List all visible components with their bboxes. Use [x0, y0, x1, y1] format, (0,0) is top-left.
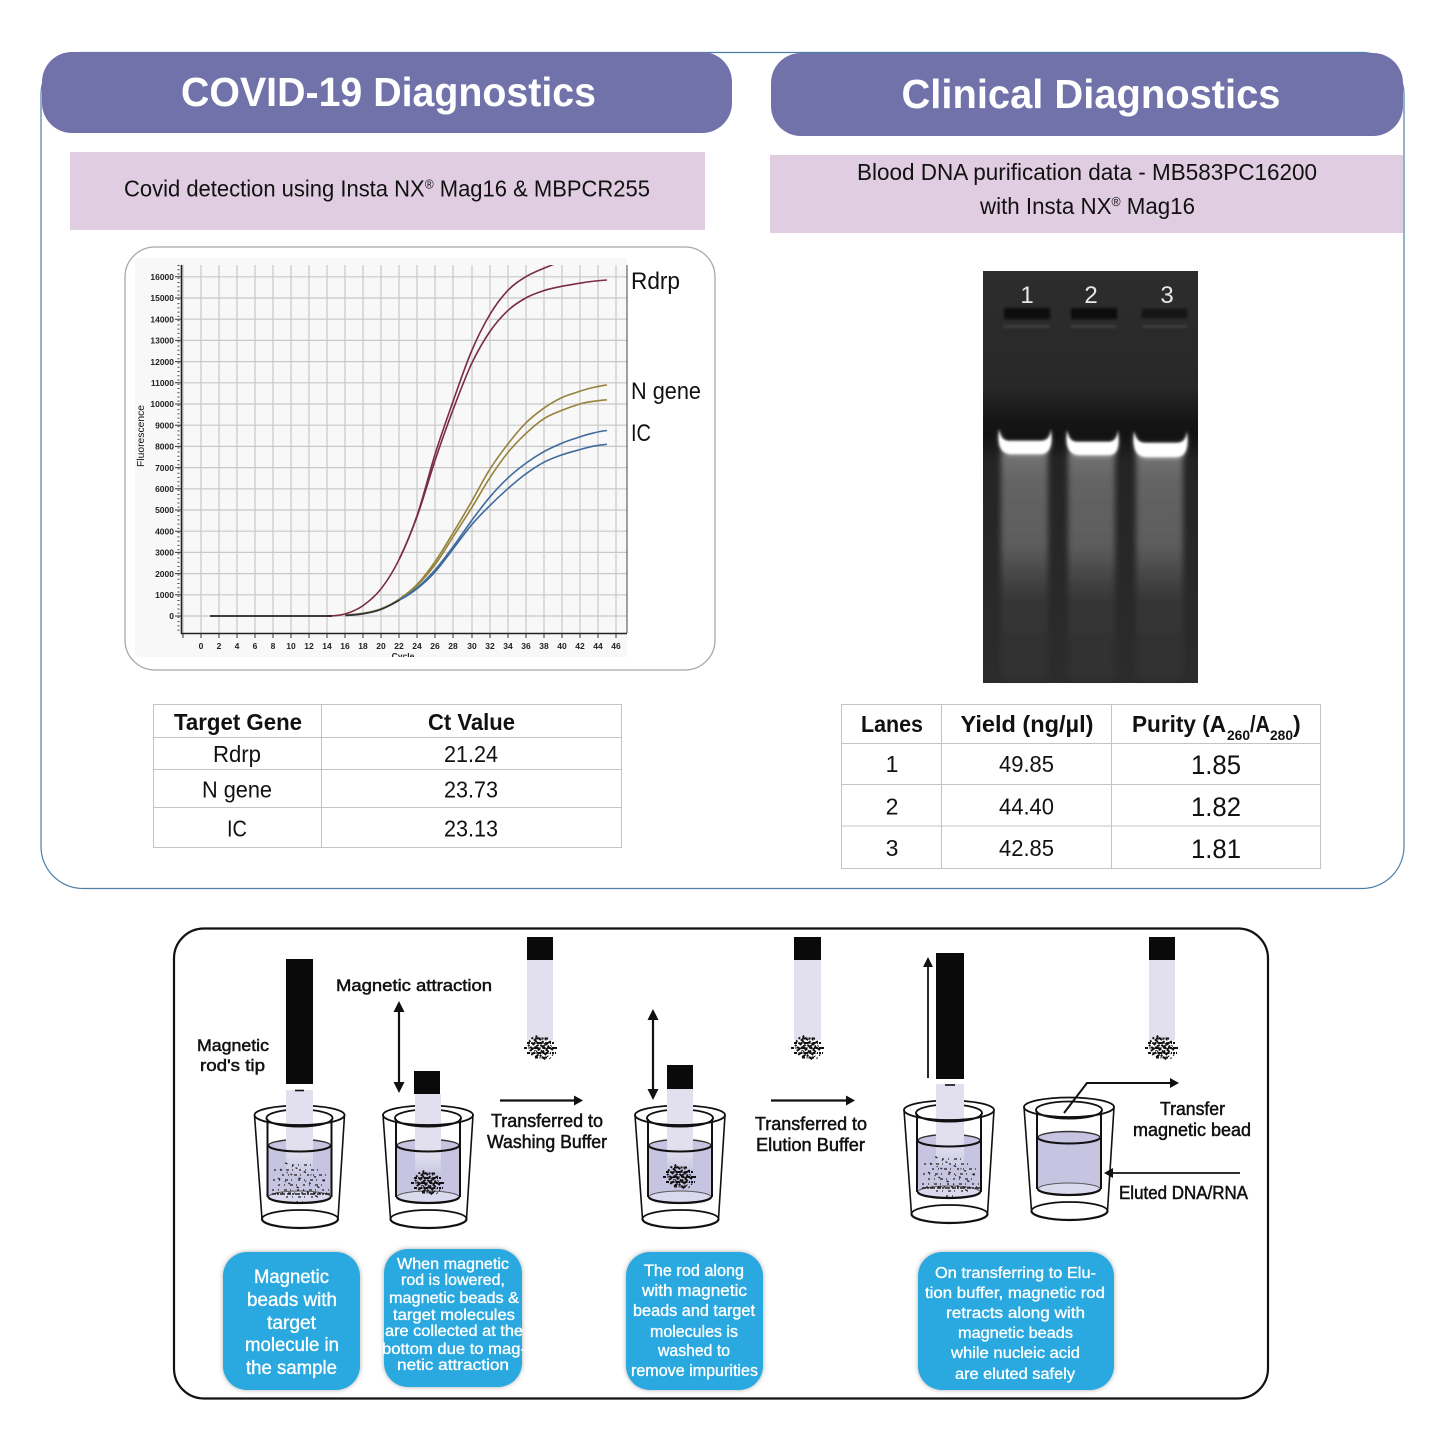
y axis tick labels: 2000: [155, 569, 174, 579]
table: gel yield and purity: 42.85: [999, 835, 1054, 861]
y axis tick labels: 3000: [155, 548, 174, 558]
gel lane numbers: [1020, 282, 1174, 309]
gel lane numbers: 2: [1084, 282, 1098, 309]
subheading: blood DNA purification: Blood DNA purification data - MB583PC16200: [857, 159, 1317, 185]
subheading: covid detection: Mag16 & MBPCR255: [434, 176, 650, 202]
table: gel yield and purity: 1.85: [1191, 750, 1241, 780]
table: gel yield and purity: /A: [1250, 711, 1270, 737]
y axis tick labels: 1000: [155, 590, 174, 600]
subheading: covid detection: Covid detection using Insta NX: [124, 176, 445, 202]
table: gel yield and purity: [842, 704, 1320, 868]
heading: COVID-19 Diagnostics: COVID-19 Diagnostics: [181, 69, 596, 115]
curve labels: N gene: [631, 378, 701, 405]
labels: workflow captions: rod's tip: [200, 1056, 265, 1075]
heading: COVID-19 Diagnostics: [42, 52, 732, 133]
heading: Clinical Diagnostics: Clinical Diagnostics: [902, 71, 1280, 117]
table: gel yield and purity: 280: [1270, 727, 1293, 743]
arrow: to elution buffer: [771, 1096, 855, 1106]
y axis tick labels: 4000: [155, 526, 174, 536]
y axis tick labels: 0: [169, 611, 174, 621]
callout: step 3: with magnetic: [641, 1282, 747, 1300]
callout: step 1: target: [267, 1313, 317, 1334]
x axis tick labels: [199, 641, 621, 651]
arrow: to washing buffer: [500, 1096, 583, 1106]
table: gel yield and purity: Purity (A: [1132, 711, 1226, 737]
callout: step 2: [382, 1249, 526, 1387]
curve labels: [631, 268, 701, 447]
step 5: eluted DNA/RNA beaker: [1024, 1098, 1114, 1220]
y axis tick labels: 9000: [155, 420, 174, 430]
labels: workflow captions: Transfer: [1160, 1099, 1225, 1119]
table: Ct values: Target Gene: [174, 709, 302, 735]
gel wells: [1003, 308, 1187, 328]
callout: step 2: target molecules: [393, 1307, 515, 1324]
y axis tick labels: 8000: [155, 442, 174, 452]
y axis tick labels: 14000: [150, 314, 174, 324]
callout: step 2: When magnetic: [397, 1256, 509, 1273]
labels: workflow captions: Elution Buffer: [756, 1135, 865, 1155]
y axis tick labels: 12000: [150, 357, 174, 367]
x axis tick labels: 8: [271, 641, 276, 651]
curve labels: IC: [631, 420, 651, 447]
table: gel yield and purity: 2: [886, 794, 898, 820]
gel lane numbers: 3: [1160, 282, 1174, 309]
table: gel yield and purity: 44.40: [999, 794, 1054, 820]
curve labels: Rdrp: [631, 268, 680, 295]
subheading: covid detection: ®: [425, 176, 434, 192]
x axis tick labels: 22: [394, 641, 404, 651]
arrow: rod retraction: [923, 957, 933, 1078]
callout: step 3: remove impurities: [631, 1362, 758, 1380]
table: Ct values: IC: [227, 816, 247, 842]
curves: IC: [345, 430, 607, 615]
floating rod with beads 1: [524, 937, 558, 1062]
labels: workflow captions: Washing Buffer: [487, 1132, 607, 1152]
callout: step 3: beads and target: [633, 1302, 755, 1320]
x axis tick labels: 42: [575, 641, 585, 651]
subheading: blood DNA purification: [770, 155, 1403, 233]
x axis tick labels: 24: [412, 641, 422, 651]
table: Ct values: N gene: [202, 776, 272, 802]
callout: step 4: tion buffer, magnetic rod: [925, 1285, 1105, 1302]
y axis tick labels: 5000: [155, 505, 174, 515]
x axis tick labels: 44: [593, 641, 603, 651]
x axis tick labels: 10: [286, 641, 296, 651]
step 2: rod lowered into beaker: [383, 1071, 473, 1228]
y axis tick labels: 15000: [150, 293, 174, 303]
table: Ct values: Rdrp: [213, 741, 261, 767]
x axis tick labels: 2: [217, 641, 222, 651]
floating rod with beads 3: [1145, 937, 1179, 1062]
chart gridlines and axes: [175, 265, 627, 661]
callout: step 3: washed to: [657, 1342, 730, 1360]
table: gel yield and purity: 3: [886, 835, 898, 861]
x axis tick labels: 36: [521, 641, 531, 651]
arrow: eluted DNA/RNA: [1104, 1168, 1240, 1178]
y axis tick labels: [150, 272, 174, 621]
x axis tick labels: 28: [448, 641, 458, 651]
labels: workflow captions: Magnetic: [197, 1036, 270, 1055]
gel lane numbers: 1: [1020, 282, 1034, 309]
arrow: transfer magnetic bead: [1064, 1078, 1179, 1113]
callout: step 4: while nucleic acid: [950, 1345, 1080, 1362]
y axis tick labels: 16000: [150, 272, 174, 282]
x axis tick labels: 32: [485, 641, 495, 651]
callout: step 2: bottom due to mag-: [382, 1341, 526, 1358]
table: Ct values: 21.24: [444, 741, 498, 767]
table: Ct values: 23.73: [444, 776, 498, 802]
callout: step 4: retracts along with: [946, 1305, 1085, 1322]
x axis tick labels: 4: [235, 641, 240, 651]
y axis tick labels: 13000: [150, 336, 174, 346]
x axis tick labels: 6: [253, 641, 258, 651]
step 4: rod retracting from elution buffer: [904, 953, 994, 1223]
y axis tick labels: 6000: [155, 484, 174, 494]
subheading: blood DNA purification: ®: [1111, 194, 1121, 209]
callout: step 1: Magnetic: [254, 1267, 329, 1288]
labels: workflow captions: Transferred to: [491, 1111, 603, 1131]
labels: workflow captions: Eluted DNA/RNA: [1119, 1183, 1248, 1203]
subheading: covid detection: [70, 152, 705, 230]
x axis tick labels: 34: [503, 641, 513, 651]
callout: step 1: beads with: [247, 1290, 337, 1311]
table: gel yield and purity: 1: [886, 751, 898, 777]
curves: N gene: [345, 385, 607, 615]
table: Ct values: 23.13: [444, 816, 498, 842]
table: gel yield and purity: 49.85: [999, 751, 1054, 777]
callout: step 4: are eluted safely: [955, 1366, 1075, 1383]
callout: step 1: the sample: [246, 1358, 337, 1379]
y axis title: Fluorescence: [136, 405, 147, 467]
x axis tick labels: 14: [322, 641, 332, 651]
panel: diagnostics results frame: [41, 52, 1404, 888]
callout: step 2: netic attraction: [397, 1357, 509, 1374]
callout: step 3: [626, 1252, 763, 1390]
callout: step 1: [223, 1252, 360, 1390]
x axis tick labels: 18: [358, 641, 368, 651]
heading: Clinical Diagnostics: [771, 53, 1403, 136]
x axis tick labels: 30: [467, 641, 477, 651]
x axis tick labels: 38: [539, 641, 549, 651]
x axis tick labels: 0: [199, 641, 204, 651]
table: gel yield and purity: Lanes: [861, 711, 923, 737]
labels: workflow captions: [197, 976, 1251, 1203]
callout: step 3: molecules is: [650, 1323, 738, 1341]
table: gel yield and purity: 1.82: [1191, 792, 1241, 822]
x axis tick labels: 46: [611, 641, 621, 651]
gel band glow: [999, 430, 1187, 458]
labels: workflow captions: Magnetic attraction: [336, 976, 492, 995]
table: gel yield and purity: 1.81: [1191, 834, 1241, 864]
callout: step 3: The rod along: [644, 1262, 744, 1280]
labels: workflow captions: magnetic bead: [1133, 1120, 1251, 1140]
x axis tick labels: 20: [376, 641, 386, 651]
floating rod with beads 2: [791, 937, 825, 1062]
callout: step 2: are collected at the: [385, 1323, 523, 1340]
gel smears: [1001, 452, 1183, 678]
callout: step 1: molecule in: [245, 1335, 339, 1356]
callout: step 2: rod is lowered,: [401, 1272, 505, 1289]
gel image: [983, 271, 1198, 683]
panel: magnetic bead workflow: [174, 928, 1268, 1398]
arrow: up and down at step 2: [394, 1001, 404, 1093]
y axis tick labels: 11000: [151, 378, 174, 388]
x axis tick labels: 16: [340, 641, 350, 651]
callout: step 2: magnetic beads &: [389, 1290, 519, 1307]
x axis tick labels: 40: [557, 641, 567, 651]
x axis tick labels: 12: [304, 641, 314, 651]
table: gel yield and purity: ): [1293, 711, 1301, 737]
table: Ct values: [154, 704, 622, 848]
subheading: blood DNA purification: with Insta NX: [980, 193, 1118, 219]
x axis tick labels: 26: [430, 641, 440, 651]
labels: workflow captions: Transferred to: [755, 1114, 867, 1134]
y axis tick labels: 7000: [155, 463, 174, 473]
callout: step 4: magnetic beads: [958, 1325, 1073, 1342]
table: gel yield and purity: 260: [1227, 727, 1250, 743]
callout: step 4: On transferring to Elu-: [935, 1265, 1096, 1282]
step 1: rod above sample beaker: [254, 959, 344, 1228]
step 3: rod in washing buffer: [635, 1065, 725, 1228]
table: Ct values: Ct Value: [428, 709, 515, 735]
curves: Rdrp: [210, 262, 607, 616]
callout: step 4: [918, 1252, 1114, 1390]
y axis tick labels: 10000: [150, 399, 174, 409]
chart gridlines and axes: Cycle: [392, 651, 415, 661]
panel: amplification chart: [125, 247, 715, 670]
subheading: blood DNA purification: Mag16: [1121, 193, 1195, 219]
gel bands: [999, 429, 1187, 457]
table: gel yield and purity: Yield (ng/µl): [960, 711, 1094, 737]
arrow: up and down at step 3: [648, 1009, 658, 1100]
